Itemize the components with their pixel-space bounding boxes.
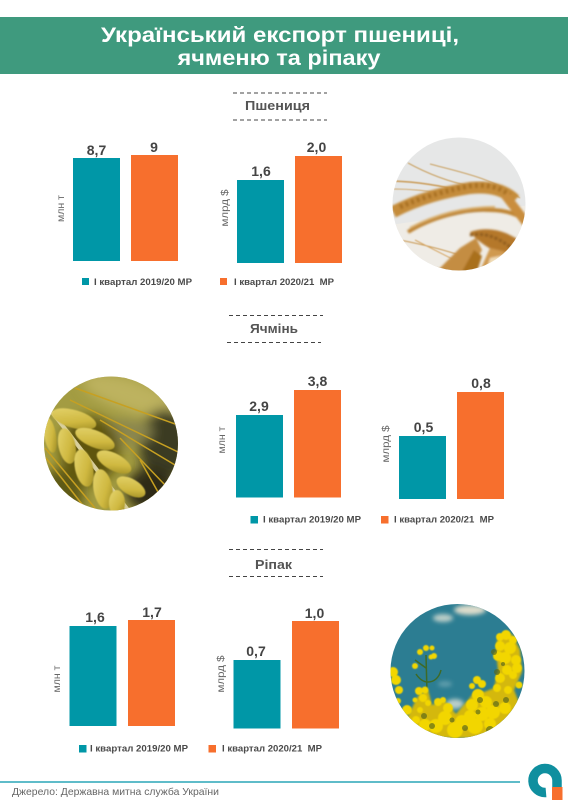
chart: wheat volume: млн т — [56, 195, 67, 222]
chart: barley volume: 2,9 — [249, 398, 269, 414]
legend: rapeseed volume: І квартал 2019/20 МР — [90, 744, 188, 754]
photo: rapeseed flowers — [388, 600, 528, 742]
chart: barley volume — [217, 373, 341, 498]
chart: barley value: 0,5 — [414, 419, 433, 435]
chart: rapeseed value: 0,7 — [246, 643, 266, 659]
heading: rapeseed — [229, 550, 323, 576]
chart: rapeseed volume: млн т — [52, 665, 63, 693]
chart: wheat value — [220, 139, 342, 263]
chart: rapeseed volume: 1,7 — [142, 604, 162, 620]
logo — [533, 769, 562, 800]
legend: barley volume: І квартал 2020/21 МР — [394, 514, 494, 524]
heading: wheat: Пшениця — [245, 98, 310, 113]
footer rule — [0, 781, 520, 783]
chart: barley value: 0,8 — [471, 375, 491, 391]
heading: wheat — [233, 93, 327, 120]
chart: barley volume: 3,8 — [308, 373, 327, 389]
source note: Джерело: Державна митна служба України — [12, 786, 219, 798]
chart: wheat value: млрд $ — [220, 189, 231, 226]
chart: barley value: млрд $ — [381, 425, 392, 462]
flower mass underlay — [405, 634, 522, 738]
heading: barley: Ячмінь — [250, 321, 298, 336]
legend: wheat volume: І квартал 2020/21 МР — [234, 277, 334, 287]
legend: rapeseed volume — [79, 744, 322, 754]
chart: wheat value: 2,0 — [307, 139, 326, 155]
title banner: ячменю та ріпаку — [176, 47, 381, 70]
chart: rapeseed volume: 1,6 — [85, 609, 105, 625]
chart: rapeseed value — [216, 605, 339, 728]
legend: rapeseed volume: І квартал 2020/21 МР — [222, 744, 322, 754]
chart: wheat volume: 9 — [150, 139, 158, 155]
heading: barley — [227, 316, 323, 342]
heading: rapeseed: Ріпак — [255, 557, 293, 572]
legend: wheat volume — [82, 277, 334, 287]
chart: rapeseed value: 1,0 — [305, 605, 324, 621]
title banner: Український експорт пшениці, — [101, 24, 459, 47]
photo: wheat ears — [390, 135, 530, 275]
chart: rapeseed value: млрд $ — [216, 655, 227, 692]
photo: barley ear — [44, 376, 178, 510]
chart: barley volume: млн т — [217, 426, 228, 454]
chart: wheat value: 1,6 — [251, 163, 271, 179]
title banner — [0, 17, 568, 74]
legend: barley volume: І квартал 2019/20 МР — [263, 514, 361, 524]
chart: wheat volume: 8,7 — [87, 142, 106, 158]
chart: rapeseed volume — [52, 604, 175, 726]
chart: barley value — [381, 375, 504, 499]
chart: wheat volume — [56, 139, 178, 261]
legend: barley volume — [250, 514, 494, 524]
legend: wheat volume: І квартал 2019/20 МР — [94, 277, 192, 287]
